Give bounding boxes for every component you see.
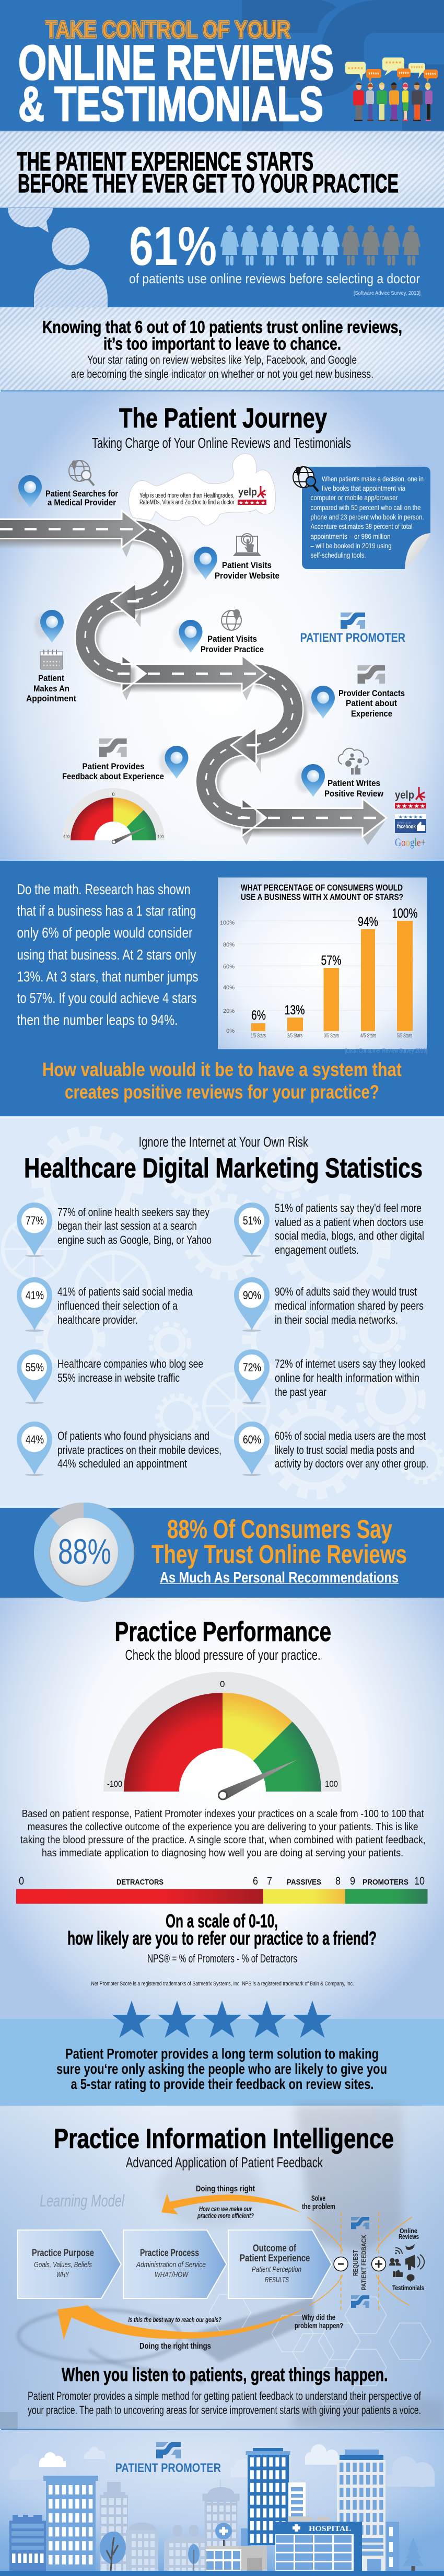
- text: do the math: to 57%. If you could achieve 4 stars: [17, 990, 196, 1006]
- title: testimonials: & TESTIMONIALS: [18, 76, 323, 131]
- heading: knowing 6 out of 10: [42, 317, 402, 353]
- y axis labels: 0%: [226, 1028, 235, 1034]
- text: booking statistics: compared with 50 percent who call on the: [310, 503, 421, 512]
- icon: laptop touch: [234, 534, 260, 556]
- panel: do the math: [0, 861, 444, 1116]
- text: request patient feedback: REQUEST: [352, 2250, 359, 2276]
- label: makes appointment: Appointment: [26, 694, 76, 703]
- text: do the math: using that business. At 2 stars only: [17, 946, 196, 963]
- text: do the math: that if a business has a 1 star rating: [17, 903, 196, 919]
- chart: small gauge: 0: [112, 792, 115, 797]
- chart title: WHAT PERCENTAGE OF CONSUMERS WOULD: [241, 883, 403, 893]
- text: yelp claim: [139, 491, 235, 506]
- text: star rating: [71, 353, 373, 380]
- logos: review sites: facebook: [397, 824, 416, 830]
- icon: black globe search: [293, 467, 318, 491]
- stat: 41%: healthcare provider.: [57, 1313, 138, 1326]
- heading: how valuable: [42, 1059, 402, 1103]
- text: make practice efficient: [197, 2205, 254, 2220]
- diagram: dashed lines and curves: [307, 2212, 412, 2310]
- label: provider contacts: Patient about: [346, 698, 397, 708]
- text: doing things right: Doing things right: [196, 2185, 255, 2193]
- icon: social media cluster: [389, 2244, 424, 2282]
- road: winding path with arrows: [0, 511, 387, 845]
- icon: five stars: [112, 2001, 332, 2038]
- chart: small gauge: -100: [63, 834, 69, 839]
- heading: scale question: [67, 1910, 377, 1949]
- y axis labels: 80%: [223, 942, 235, 948]
- label: writes review: [324, 778, 384, 799]
- callout: yelp cloud: [128, 454, 275, 525]
- chart title: [241, 883, 403, 902]
- chart: NPS scale bar: 0: [19, 1875, 24, 1887]
- y axis labels: 20%: [223, 1008, 235, 1014]
- logos: review sites: ★★★★★: [395, 803, 426, 810]
- chart: large gauge: [103, 1672, 342, 1800]
- arrow 1: [0, 511, 146, 557]
- y axis labels: 40%: [223, 985, 235, 991]
- icon: person with speech bubble: [8, 208, 108, 307]
- y axis labels: [220, 920, 235, 1034]
- text: do the math: [17, 881, 198, 1028]
- tree: small: [188, 2544, 200, 2571]
- building: right tower: [337, 2450, 385, 2571]
- subheading: blood pressure: Check the blood pressure of your practice.: [125, 1647, 321, 1663]
- text: do the math: Do the math. Research has shown: [17, 881, 190, 897]
- stat: 72%: online for health information within: [275, 1371, 419, 1384]
- label: patient searches: Patient Searches for: [45, 489, 118, 499]
- label: visits website: Patient Visits: [222, 560, 272, 570]
- text: index explanation: [20, 1808, 426, 1859]
- subheading: ignore the internet: Ignore the Internet at Your Own Risk: [139, 1134, 308, 1150]
- arrow 5: [238, 799, 387, 845]
- label: visits practice: [201, 634, 264, 654]
- bar values: [251, 906, 418, 1023]
- x axis labels: 1/5 Stars: [251, 1033, 266, 1039]
- heading: practice performance: Practice Performance: [115, 1616, 331, 1647]
- background photo impression: [0, 2106, 444, 2429]
- text: why did the problem happen: [295, 2313, 343, 2330]
- panel: city skyline footer: [0, 2430, 444, 2576]
- label: patient searches: a Medical Provider: [48, 498, 116, 507]
- label: provider contacts: Provider Contacts: [338, 688, 405, 698]
- text: booking statistics: – will be booked in 2019 using: [310, 541, 392, 550]
- x axis labels: [251, 1033, 412, 1039]
- label: provides feedback: Patient Provides: [83, 761, 144, 771]
- label: provides feedback: Feedback about Experience: [62, 771, 164, 781]
- logos: promoter blue: [351, 2217, 369, 2308]
- building: left tower: [43, 2476, 98, 2571]
- chevron: practice process: WHAT/HOW: [155, 2270, 189, 2279]
- icon: calendar: [40, 650, 63, 669]
- text: best way: Is this the best way to reach our goals?: [128, 2316, 221, 2324]
- icon: map pins: [13, 475, 335, 797]
- chevron: outcome of patient experience: Patient Experience: [240, 2253, 310, 2264]
- logos: review sites: [395, 787, 426, 849]
- chart: small gauge: 100: [158, 834, 163, 839]
- stat: 55%: 55%: [26, 1361, 44, 1374]
- stat: 90%: [234, 1277, 424, 1332]
- text: booking statistics: appointments – or 986 million: [310, 532, 391, 540]
- stat: 44%: [17, 1422, 221, 1476]
- logo: yelp with stars: yelp: [238, 487, 257, 498]
- clouds: [10, 2444, 435, 2487]
- y axis labels: 60%: [223, 964, 235, 970]
- stat: 55%: [17, 1349, 203, 1404]
- chart: large gauge: 100: [325, 1779, 338, 1789]
- chevron: outcome of patient experience: [228, 2230, 332, 2298]
- label: visits website: Provider Website: [215, 571, 279, 581]
- icon: people with review speech bubbles: ★★★★★: [347, 66, 364, 71]
- stat: 44%: Of patients who found physicians and: [57, 1429, 209, 1442]
- icon: people with review speech bubbles: ★★★★★: [385, 60, 402, 65]
- chart: large gauge: -100: [107, 1779, 122, 1789]
- logo: patient promoter: PATIENT PROMOTER: [115, 2461, 221, 2475]
- chart: NPS scale bar: 10: [414, 1875, 425, 1887]
- icon: people with review speech bubbles: ★★★★★: [411, 65, 423, 70]
- x axis labels: 3/5 Stars: [324, 1033, 339, 1039]
- x axis labels: 5/5 Stars: [397, 1033, 412, 1039]
- text: learning model: Learning Model: [40, 2191, 125, 2210]
- chart: NPS scale bar: 9: [350, 1875, 355, 1887]
- text: index explanation: has immediate application to diagnosing how well you are doing at serving your patients.: [42, 1847, 403, 1859]
- chart: star rating bar chart: [218, 877, 427, 1049]
- text: booking statistics: five books that appointment via: [322, 484, 405, 492]
- heading: patient experience: [17, 147, 399, 198]
- chart: small gauge: [62, 788, 165, 844]
- heading: 88 percent trust: [151, 1515, 407, 1569]
- text: star rating: Your star rating on review websites like Yelp, Facebook, and Google: [87, 353, 357, 366]
- icon: minus: [334, 2257, 348, 2271]
- text: yelp claim: Yelp is used more often than Healthgrades,: [139, 491, 235, 499]
- chart: NPS scale bar: 7: [267, 1875, 272, 1887]
- text: request patient feedback: [352, 2235, 368, 2290]
- chart: NPS scale bar: 6: [253, 1875, 258, 1887]
- stat: 77%: 77%: [26, 1214, 44, 1227]
- icon: people with review speech bubbles: [345, 57, 438, 121]
- arrow 2: [111, 584, 141, 627]
- chevron: practice process: Administration of Service: [136, 2260, 206, 2269]
- label: visits practice: Patient Visits: [207, 634, 257, 644]
- icon: people with review speech bubbles: ★★★★★: [425, 72, 436, 76]
- stat: 77%: 77% of online health seekers say they: [57, 1206, 209, 1219]
- label: writes review: Positive Review: [324, 789, 384, 799]
- callout: note with booking statistics: [293, 467, 430, 569]
- chevron: practice process: Practice Process: [140, 2248, 199, 2259]
- icon: grey promoter logo: [357, 665, 385, 684]
- text: do the math: 13%. At 3 stars, that number jumps: [17, 968, 198, 985]
- arrow 4: [231, 727, 261, 772]
- building: small white: [288, 2482, 306, 2517]
- panel: 88 percent trust: [0, 1503, 444, 1602]
- panel: healthcare digital marketing statistics: [0, 1116, 444, 1508]
- heading: the patient journey: The Patient Journey: [119, 403, 327, 434]
- text: solve the problem: Solve: [311, 2194, 325, 2203]
- stat: 90%: 90%: [243, 1289, 261, 1302]
- text: make practice efficient: practice more efficient?: [197, 2212, 254, 2220]
- chart: NPS scale bar: PASSIVES: [287, 1878, 321, 1887]
- y axis labels: 100%: [220, 920, 235, 926]
- bars: [251, 921, 413, 1031]
- text: why did the problem happen: problem happen?: [295, 2321, 343, 2330]
- icon: globe with pin: [221, 609, 241, 630]
- chart: 88% donut: 88%: [58, 1532, 111, 1572]
- building: hospital: [275, 2516, 362, 2571]
- ground strip: [0, 2571, 444, 2576]
- logo: patient promoter: PATIENT PROMOTER: [300, 631, 405, 645]
- chevron: practice purpose: Goals, Values, Beliefs: [34, 2260, 92, 2269]
- text: star rating: are becoming the single indicator on whether or not you get new business.: [71, 367, 373, 380]
- text: do the math: only 6% of people would consider: [17, 925, 192, 941]
- arrow 3: [118, 655, 266, 700]
- title: take control: TAKE CONTROL OF YOUR: [45, 16, 290, 43]
- text: booking statistics: [310, 475, 424, 559]
- panel: 61 percent statistic: [0, 208, 444, 307]
- text: NPS formula: NPS® = % of Promoters - % of Detractors: [147, 1952, 297, 1965]
- text: booking statistics: computer or mobile app/browser: [310, 493, 398, 502]
- chart: NPS scale bar: [16, 1875, 427, 1904]
- stat: 41%: [17, 1277, 193, 1332]
- chevron: practice purpose: WHY: [56, 2270, 69, 2279]
- text: simple method: [28, 2389, 422, 2417]
- label: visits website: [215, 560, 279, 581]
- label: makes appointment: [26, 673, 76, 703]
- chart title: USE A BUSINESS WITH X AMOUNT OF STARS?: [241, 892, 403, 902]
- icon: plus: [372, 2257, 385, 2271]
- panel: practice performance: [0, 1598, 444, 2019]
- logo: patient promoter: [300, 613, 405, 645]
- subheading: taking charge: Taking Charge of Your Online Reviews and Testimonials: [92, 435, 351, 451]
- icon: people with review speech bubbles: ★★★★★: [368, 71, 379, 76]
- stat: 90%: in their social media networks.: [275, 1313, 398, 1326]
- icon: social cloud: [338, 748, 368, 775]
- bar values: 57%: [321, 953, 342, 968]
- arrow: top orange: [161, 2193, 301, 2214]
- chevron: practice process: [123, 2230, 227, 2298]
- logo: yelp with stars: ★★★★★: [238, 500, 266, 506]
- label: visits practice: Provider Practice: [201, 644, 264, 654]
- panel: hero header: [0, 0, 444, 131]
- text: testimonials: Testimonials: [392, 2284, 424, 2292]
- stat: 77%: began their last session at a search: [57, 1219, 197, 1232]
- bar values: 6%: [251, 1008, 266, 1023]
- text: long term solution: [56, 2046, 387, 2092]
- chevron: outcome of patient experience: Patient Perception: [252, 2265, 301, 2274]
- title: take control: TAKE CONTROL OF YOUR: [45, 16, 290, 43]
- text: request patient feedback: PATIENT FEEDBACK: [360, 2235, 368, 2290]
- chart: 88% donut: [34, 1503, 134, 1602]
- x axis labels: 4/5 Stars: [360, 1033, 376, 1039]
- x axis labels: 2/5 Stars: [287, 1033, 302, 1039]
- icon: people with review speech bubbles: ★★★★★: [399, 71, 409, 75]
- text: booking statistics: Accenture estimates 38 percent of total: [310, 522, 413, 530]
- ghost buildings: [100, 2480, 239, 2571]
- bar values: 100%: [392, 906, 418, 921]
- text: solve the problem: [302, 2194, 335, 2211]
- title: online reviews: ONLINE REVIEWS: [18, 35, 334, 90]
- logo: patient promoter: [115, 2442, 221, 2475]
- text: online reviews: Online: [400, 2227, 417, 2235]
- stat: 77%: engine such as Google, Bing, or Yahoo: [57, 1233, 212, 1246]
- panel: the patient journey: [0, 391, 444, 861]
- panel: long term solution band: [0, 2019, 444, 2106]
- stat: 60%: 60%: [243, 1433, 261, 1446]
- chart: NPS scale bar: DETRACTORS: [116, 1878, 163, 1887]
- stat: 41%: 41% of patients said social media: [57, 1285, 193, 1298]
- stat: 55%: 55% increase in website traffic: [57, 1371, 180, 1384]
- stat: 41%: influenced their selection of a: [57, 1299, 178, 1312]
- stat: 51%: 51%: [243, 1214, 261, 1227]
- stat: 51%: [234, 1202, 424, 1257]
- logos: review sites: ★★★★★: [398, 815, 423, 819]
- building: wing behind hospital: [241, 2522, 399, 2571]
- text: booking statistics: When patients make a decision, one in: [322, 475, 424, 483]
- label: makes appointment: Makes An: [33, 684, 69, 694]
- text: why did the problem happen: Why did the: [302, 2313, 335, 2322]
- stat: 72%: 72%: [243, 1361, 261, 1374]
- stat: 60%: [234, 1422, 428, 1476]
- arrow: bottom orange: [57, 2305, 305, 2340]
- label: provider contacts: Experience: [351, 709, 392, 719]
- label: makes appointment: Patient: [38, 673, 64, 683]
- text: solve the problem: the problem: [302, 2202, 335, 2211]
- stat: 77%: [17, 1203, 212, 1257]
- chart: NPS scale bar: 8: [335, 1875, 341, 1887]
- logos: review sites: review us on: [397, 822, 411, 825]
- chart: NPS scale bar: PROMOTERS: [363, 1878, 408, 1887]
- icon: globe search: [69, 460, 94, 486]
- stat: 72%: [234, 1349, 425, 1404]
- logo: yelp with stars: [238, 486, 266, 506]
- building: clinic with cross sign: [206, 2523, 267, 2571]
- text: make practice efficient: How can we make our: [199, 2205, 252, 2213]
- tree: pine: [403, 2538, 424, 2572]
- icon: grey promoter logo: [99, 738, 127, 757]
- stat: 41%: 41%: [26, 1289, 44, 1302]
- label: provides feedback: [62, 761, 164, 781]
- label: writes review: Patient Writes: [328, 778, 380, 788]
- label: patient searches: [45, 489, 118, 507]
- text: trademark footnote: Net Promoter Score is a registered trademarks of Satmetrix Systems, Inc. NPS is a registered trademark of Bain & Company, Inc.: [91, 1981, 354, 1987]
- stat: 55%: Healthcare companies who blog see: [57, 1357, 203, 1370]
- building: hospital: HOSPITAL: [309, 2525, 351, 2533]
- icon row: ten women, six highlighted: [220, 225, 420, 265]
- logos: review sites: yelp: [395, 789, 414, 801]
- text: yelp claim: RateMDs, Vitals and ZocDoc to find a doctor: [139, 498, 235, 506]
- subheading: advanced application: Advanced Application of Patient Feedback: [126, 2154, 323, 2170]
- panel: patient experience banner: [0, 131, 444, 208]
- building: far left: [9, 2515, 46, 2571]
- chart: large gauge: 0: [220, 1679, 225, 1689]
- text: do the math: then the number leaps to 94%.: [17, 1012, 178, 1028]
- stat: 44%: private practices on their mobile devices,: [57, 1443, 221, 1457]
- stat: 61%: 61%: [129, 216, 217, 277]
- heading: scale question: On a scale of 0-10,: [166, 1910, 278, 1932]
- panel: practice information intelligence: [0, 2106, 444, 2430]
- text: booking statistics: self-scheduling tools.: [310, 551, 366, 559]
- text: doing the right things: Doing the right things: [139, 2342, 211, 2351]
- chevron: practice purpose: Practice Purpose: [32, 2248, 94, 2259]
- tree: left: [100, 2532, 126, 2571]
- chevron: outcome of patient experience: Outcome of: [253, 2243, 297, 2254]
- text: online reviews: Reviews: [399, 2233, 419, 2240]
- building: tall blue tower: [246, 2448, 290, 2545]
- chevron: outcome of patient experience: RESULTS: [265, 2275, 289, 2284]
- chevron: practice purpose: [18, 2230, 121, 2298]
- panel: knowing 6 out of 10: [0, 307, 444, 391]
- stat: 72%: the past year: [275, 1385, 326, 1399]
- text: online reviews: [399, 2227, 419, 2240]
- text: source: [Software Advice Survey, 2013]: [354, 290, 420, 296]
- stat: 44%: 44%: [26, 1433, 44, 1446]
- stat: 44%: 44% scheduled an appointment: [57, 1457, 187, 1470]
- logos: review sites: Google+: [395, 836, 426, 849]
- bar values: 13%: [284, 1003, 305, 1018]
- heading: knowing 6 out of 10: it’s too important to leave to chance.: [103, 334, 341, 353]
- stat: 51%: engagement outlets.: [275, 1243, 359, 1256]
- label: provider contacts: [338, 688, 405, 719]
- bar values: 94%: [358, 915, 378, 929]
